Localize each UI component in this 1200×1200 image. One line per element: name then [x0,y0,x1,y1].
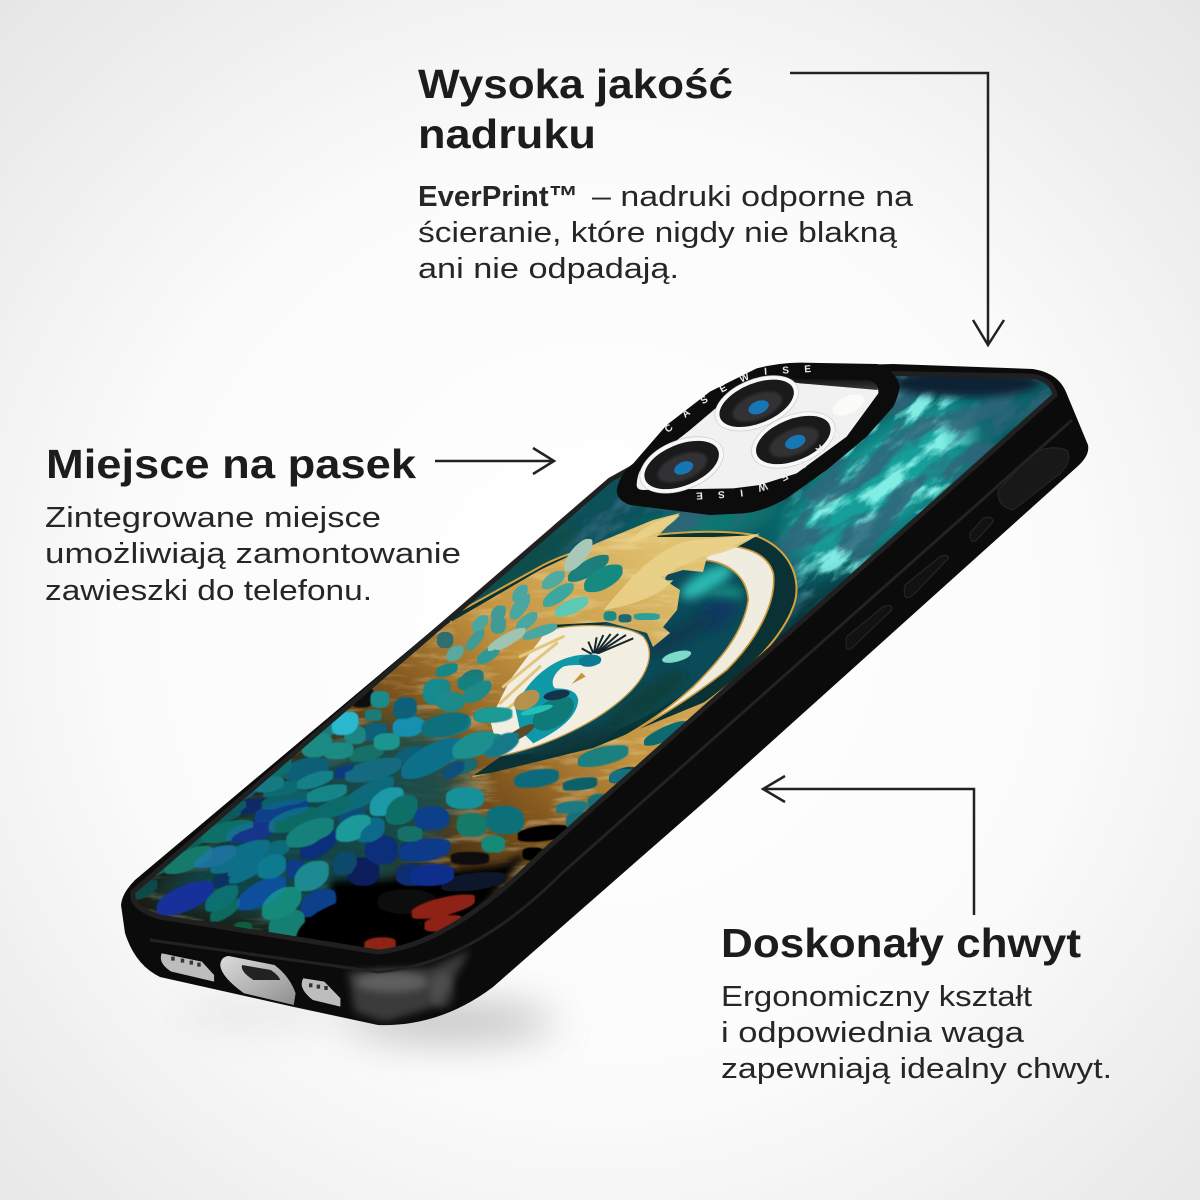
upper feathers [435,515,760,790]
camera window [637,378,878,490]
flash [830,390,867,420]
outer gold ring [450,532,797,777]
moon disc [473,626,649,757]
pale plumes [603,515,760,610]
inner nebula [493,557,748,762]
moon and crescent [450,532,797,777]
lower-left feather scales [135,688,424,942]
ring logo [665,365,836,500]
camera ring [617,363,900,515]
right speaker [302,978,340,1007]
lens: left [632,426,732,504]
heading: Miejsce na pasek [46,441,416,487]
red accents [366,893,474,951]
feather fan gold base [136,513,760,946]
body text: i odpowiednia waga [721,1017,1025,1049]
body text [721,981,1112,1085]
arrow: to case edge [763,776,974,915]
body text: – nadruki odporne na [592,181,914,213]
body text: zapewniają idealny chwyt. [721,1053,1112,1085]
phone case [121,362,1088,1026]
phone shadow [180,1002,555,1042]
heading [418,61,733,157]
charging port [220,956,296,1005]
window inner lip [770,378,878,390]
white crescent [623,546,775,736]
arrow: to print surface [790,73,1004,345]
body text: Ergonomiczny kształt [721,981,1032,1013]
bottom corner sheen [348,950,470,1022]
peacock [503,634,633,746]
side detail buttons [846,448,1069,649]
nebula background [446,376,1052,778]
charging and speaker ports [161,953,340,1007]
ring logo: CASEWISE [665,365,811,432]
heading: Wysoka jakość [418,61,733,107]
gold flames over moon [497,637,563,717]
lower-centre feather scales [366,677,632,951]
lens: top [707,365,806,442]
body text: Zintegrowane miejsce [45,502,381,534]
callout: print quality [418,61,914,285]
body text: EverPrint™ [418,181,578,213]
heading: nadruku [418,111,596,157]
body text [45,502,461,607]
arrow: to strap slot [435,448,554,474]
callout: strap slot [45,441,461,607]
body text [418,181,914,285]
dark bottom region [330,850,530,960]
left speaker [161,953,214,982]
heading: Doskonały chwyt [721,920,1081,966]
screen rim [133,372,1055,952]
case body [121,364,1088,1025]
body text: zawieszki do telefonu. [45,575,372,607]
callout: perfect grip [721,920,1112,1085]
body text: ścieranie, które nigdy nie blakną [418,217,898,249]
lower rim line [150,420,1072,972]
body text: umożliwiają zamontowanie [45,538,461,570]
ring logo: CASEWISE [696,431,836,500]
printed artwork [135,376,1052,950]
upper teal shards [435,537,690,790]
teal underpainting [140,720,470,930]
body text: ani nie odpadają. [418,253,679,285]
lens: right [743,401,843,479]
camera island [616,362,900,515]
